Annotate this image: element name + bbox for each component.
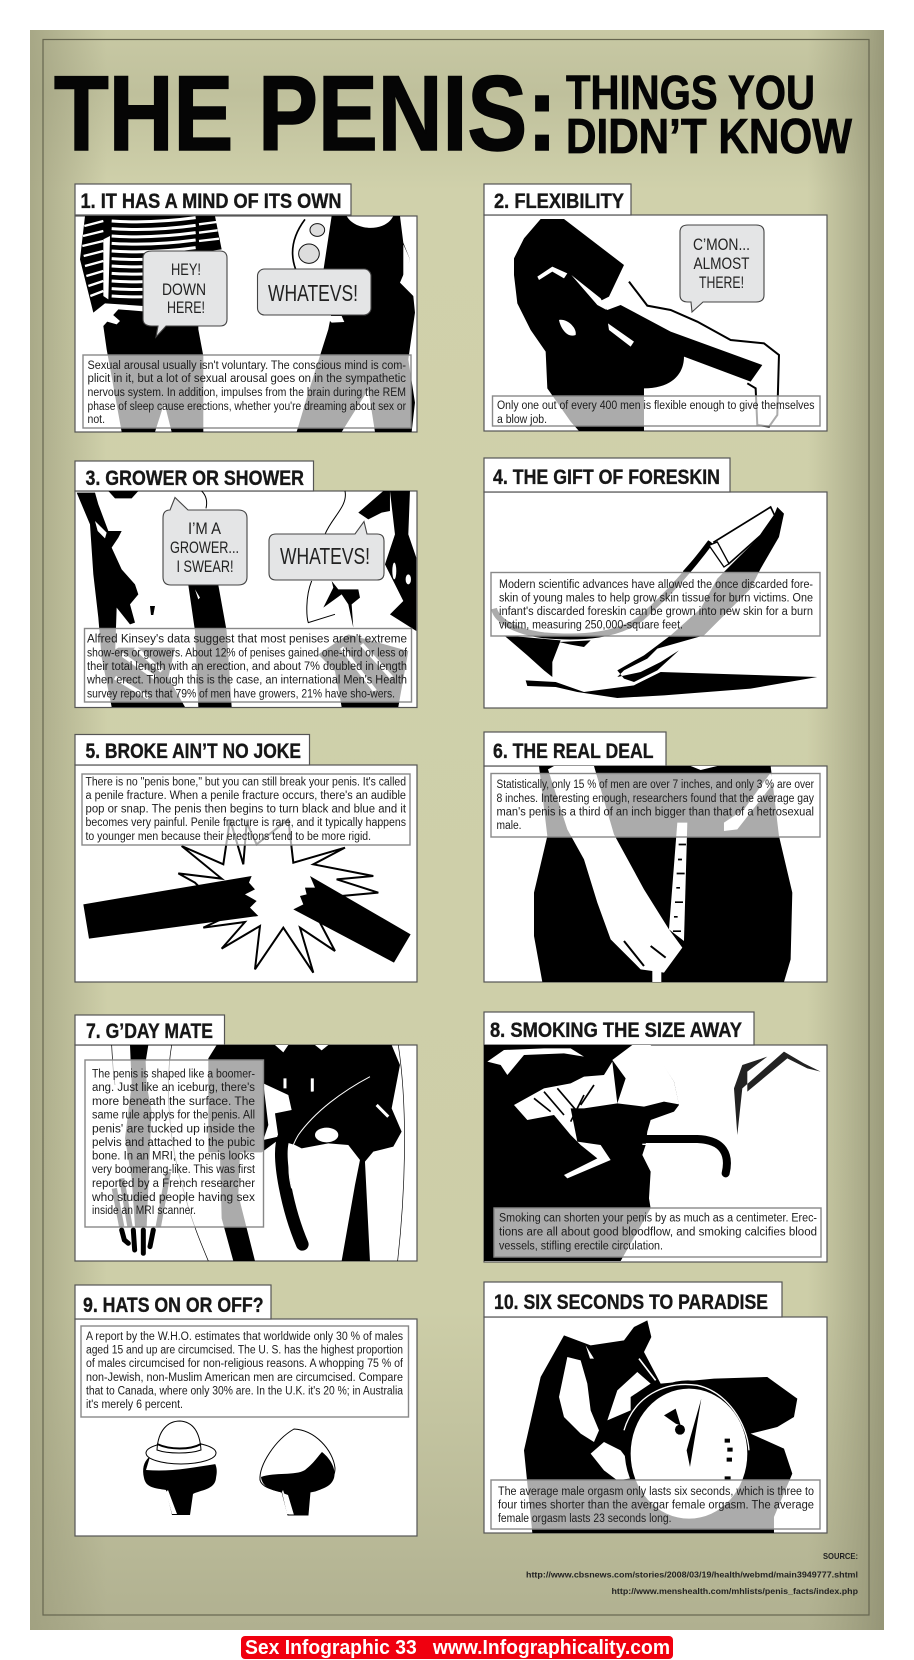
- text block 5: a penile fracture. When a penile fracture occurs, there's an audible: [86, 790, 406, 802]
- text block 8: vessels, stifling erectile circulation.: [499, 1240, 663, 1252]
- heading 4: 4. THE GIFT OF FORESKIN: [493, 466, 720, 489]
- illustration: pelvis skeleton and boomerang: [112, 1045, 405, 1261]
- illustration: two standing figures: [80, 216, 415, 432]
- speech bubble: whatevs: WHATEVS!: [268, 280, 358, 306]
- text block 9: of males circumcised for non-religious reasons. A whopping 75 % of: [86, 1358, 404, 1370]
- text block 5: becomes very painful. Penile fracture is rare, and it typically happens: [86, 817, 406, 829]
- panel 1: it has a mind of its own: [75, 184, 417, 432]
- title: THE PENIS:: [54, 53, 557, 173]
- speech bubble: c'mon almost there: C’MON...: [693, 235, 750, 254]
- text block 7: more beneath the surface. The: [92, 1096, 255, 1108]
- heading 1: [75, 184, 351, 215]
- text block 1: Sexual arousal usually isn't voluntary. The conscious mind is com-: [88, 360, 406, 372]
- text block 7: ang. Just like an iceburg, there's: [92, 1082, 255, 1094]
- text block 10: four times shorter than the avergar female orgasm. The average: [498, 1500, 814, 1512]
- speech bubble: i'm a grower: [163, 498, 247, 585]
- text block 10: The average male orgasm only lasts six seconds, which is three to: [498, 1486, 814, 1498]
- text block 1: not.: [88, 414, 105, 426]
- text block 7: pelvis and attached to the pubic: [92, 1137, 255, 1149]
- speech bubble: whatevs: [258, 269, 371, 315]
- text block 3: show-ers or growers. About 12% of penises gained one-third or less of: [87, 648, 408, 660]
- illustration: figure holding a stopwatch: [524, 1320, 797, 1533]
- text block 9: A report by the W.H.O. estimates that worldwide only 30 % of males: [86, 1331, 403, 1343]
- heading 5: [75, 734, 310, 765]
- speech bubble: i'm a grower: I’M A: [188, 519, 222, 538]
- speech bubble: whatevs: [269, 522, 384, 580]
- text block 7: penis' are tucked up inside the: [92, 1124, 255, 1136]
- text block 6: male.: [496, 820, 522, 832]
- speech bubble: hey down here: [143, 251, 227, 337]
- illustration: abstract curved shape and shadow: [494, 507, 817, 698]
- sources: http://www.menshealth.com/mhlists/penis_facts/index.php: [612, 1586, 858, 1596]
- panel 3: grower or shower: [75, 461, 417, 708]
- illustration: figure with measuring tape: [534, 766, 792, 982]
- text block 7: very boomerang-like. This was first: [92, 1164, 256, 1176]
- speech bubble: whatevs: WHATEVS!: [280, 543, 370, 569]
- panel 4: the gift of foreskin: [484, 458, 827, 708]
- text block 1: nervous system. In addition, impulses from the brain during the REM: [88, 387, 406, 399]
- panel 10: six seconds to paradise: [484, 1282, 827, 1533]
- sources: [526, 1551, 858, 1596]
- text block 3: [84, 628, 412, 702]
- text block 3: survey reports that 79% of men have growers, 21% have sho-wers.: [87, 688, 395, 700]
- text block 5: [82, 774, 410, 845]
- heading 9: [75, 1285, 271, 1319]
- text block 2: [492, 396, 820, 426]
- heading 3: 3. GROWER OR SHOWER: [86, 467, 304, 490]
- heading 7: 7. G’DAY MATE: [86, 1020, 213, 1043]
- speech bubble: i'm a grower: GROWER...: [170, 538, 239, 557]
- text block 9: it's merely 6 percent.: [86, 1399, 183, 1411]
- text block 9: aged 15 and up are circumcised. The U. S. has the highest proportion: [86, 1344, 403, 1356]
- speech bubble: i'm a grower: I SWEAR!: [176, 557, 234, 576]
- heading 3: [75, 461, 314, 491]
- heading 2: 2. FLEXIBILITY: [494, 190, 624, 213]
- title: DIDN’T KNOW: [566, 110, 853, 164]
- illustration: burst and broken bar: [83, 819, 411, 973]
- text block 9: that to Canada, where only 30% are. In the U.K. it's 20 %; in Australia: [86, 1386, 404, 1398]
- icon: bare mushroom shape: [260, 1429, 335, 1515]
- text block 7: same rule applys for the penis. All: [92, 1110, 255, 1122]
- title: THINGS YOU: [566, 67, 815, 120]
- heading 6: 6. THE REAL DEAL: [493, 740, 654, 763]
- speech bubble: c'mon almost there: [680, 225, 764, 312]
- text block 4: infant's discarded foreskin can be grown into new skin for a burn: [499, 606, 813, 618]
- illustration: bent figure: [514, 219, 779, 431]
- heading 9: 9. HATS ON OR OFF?: [83, 1294, 264, 1317]
- speech bubble: c'mon almost there: ALMOST: [694, 254, 750, 273]
- heading 7: [75, 1015, 224, 1045]
- text block 1: plicit in it, but a lot of sexual arousal goes on in the sympathetic: [88, 373, 406, 385]
- text block 5: There is no "penis bone," but you can still break your penis. It's called: [86, 776, 406, 788]
- text block 4: victim, measuring 250,000-square feet.: [499, 620, 683, 632]
- heading 1: 1. IT HAS A MIND OF ITS OWN: [80, 190, 342, 213]
- text block 7: reported by a French researcher: [92, 1178, 255, 1190]
- text block 6: [491, 774, 820, 837]
- speech bubble: c'mon almost there: THERE!: [699, 273, 744, 292]
- heading 8: [484, 1012, 754, 1045]
- text block 4: Modern scientific advances have allowed the once discarded fore-: [499, 579, 813, 591]
- text block 4: [491, 572, 820, 636]
- text block 7: inside an MRI scanner.: [92, 1205, 196, 1217]
- text block 10: female orgasm lasts 23 seconds long.: [498, 1513, 672, 1525]
- text block 10: [491, 1480, 820, 1529]
- panel 6: the real deal: [484, 732, 827, 982]
- text block 8: Smoking can shorten your penis by as much as a centimeter. Erec-: [499, 1212, 817, 1224]
- heading 6: [484, 732, 666, 766]
- text block 1: [83, 355, 411, 428]
- panel 2: flexibility: [484, 184, 827, 431]
- text block 7: [85, 1060, 264, 1227]
- text block 2: Only one out of every 400 men is flexible enough to give themselves: [497, 400, 815, 412]
- text block 3: Alfred Kinsey's data suggest that most penises aren't extreme: [87, 634, 407, 646]
- text block 5: to younger men because their erections tend to be more rigid.: [86, 831, 371, 843]
- text block 7: bone. In an MRI, the penis looks: [92, 1150, 255, 1162]
- sources: http://www.cbsnews.com/stories/2008/03/19/health/webmd/main3949777.shtml: [526, 1570, 858, 1580]
- text block 2: a blow job.: [497, 414, 547, 426]
- heading 10: [484, 1282, 782, 1317]
- text block 9: non-Jewish, non-Muslim American men are circumcised. Compare: [86, 1372, 403, 1384]
- speech bubble: hey down here: DOWN: [162, 280, 206, 299]
- text block 1: phase of sleep cause erections, whether you're dreaming about sex or: [88, 401, 406, 413]
- text block 4: skin of young males to help grow skin tissue for burn victims. One: [499, 592, 813, 604]
- heading 4: [484, 458, 730, 492]
- text block 8: tions are all about good bloodflow, and smoking calcifies blood: [499, 1226, 817, 1238]
- footer banner: Sex Infographic 33 www.Infographicality.com: [245, 1637, 670, 1659]
- text block 3: when erect. Though this is the case, an international Men's Health: [86, 674, 407, 686]
- text block 8: [494, 1208, 821, 1257]
- speech bubble: hey down here: HERE!: [167, 298, 205, 317]
- text block 5: pop or snap. The penis then begins to turn black and blue and it: [86, 804, 407, 816]
- heading 8: 8. SMOKING THE SIZE AWAY: [490, 1019, 742, 1042]
- sources: SOURCE:: [823, 1551, 858, 1561]
- heading 2: [484, 184, 631, 215]
- text block 9: [81, 1326, 408, 1417]
- panel 9: hats on or off: [75, 1285, 417, 1536]
- panel 7: g'day mate: [75, 1015, 417, 1261]
- speech bubble: hey down here: HEY!: [171, 260, 201, 279]
- text block 6: Statistically, only 15 % of men are over 7 inches, and only 3 % are over: [496, 779, 814, 791]
- text block 7: The penis is shaped like a boomer-: [92, 1068, 255, 1080]
- panel 8: smoking the size away: [484, 1012, 827, 1262]
- text block 6: 8 inches. Interesting enough, researchers found that the average gay: [496, 793, 814, 805]
- text block 6: man's penis is a third of an inch bigger than that of a hetrosexual: [496, 806, 814, 818]
- heading 10: 10. SIX SECONDS TO PARADISE: [494, 1291, 768, 1314]
- illustration: dark mass with bent tube and smoke: [484, 1045, 821, 1261]
- heading 5: 5. BROKE AIN’T NO JOKE: [86, 740, 301, 763]
- icon: mushroom shape wearing a hat: [143, 1421, 217, 1515]
- panel 5: broke ain't no joke: [75, 734, 417, 982]
- text block 3: their total length with an erection, and about 7% doubled in length: [87, 661, 407, 673]
- illustration: two figures: [77, 491, 416, 707]
- text block 7: who studied people having sex: [91, 1192, 255, 1204]
